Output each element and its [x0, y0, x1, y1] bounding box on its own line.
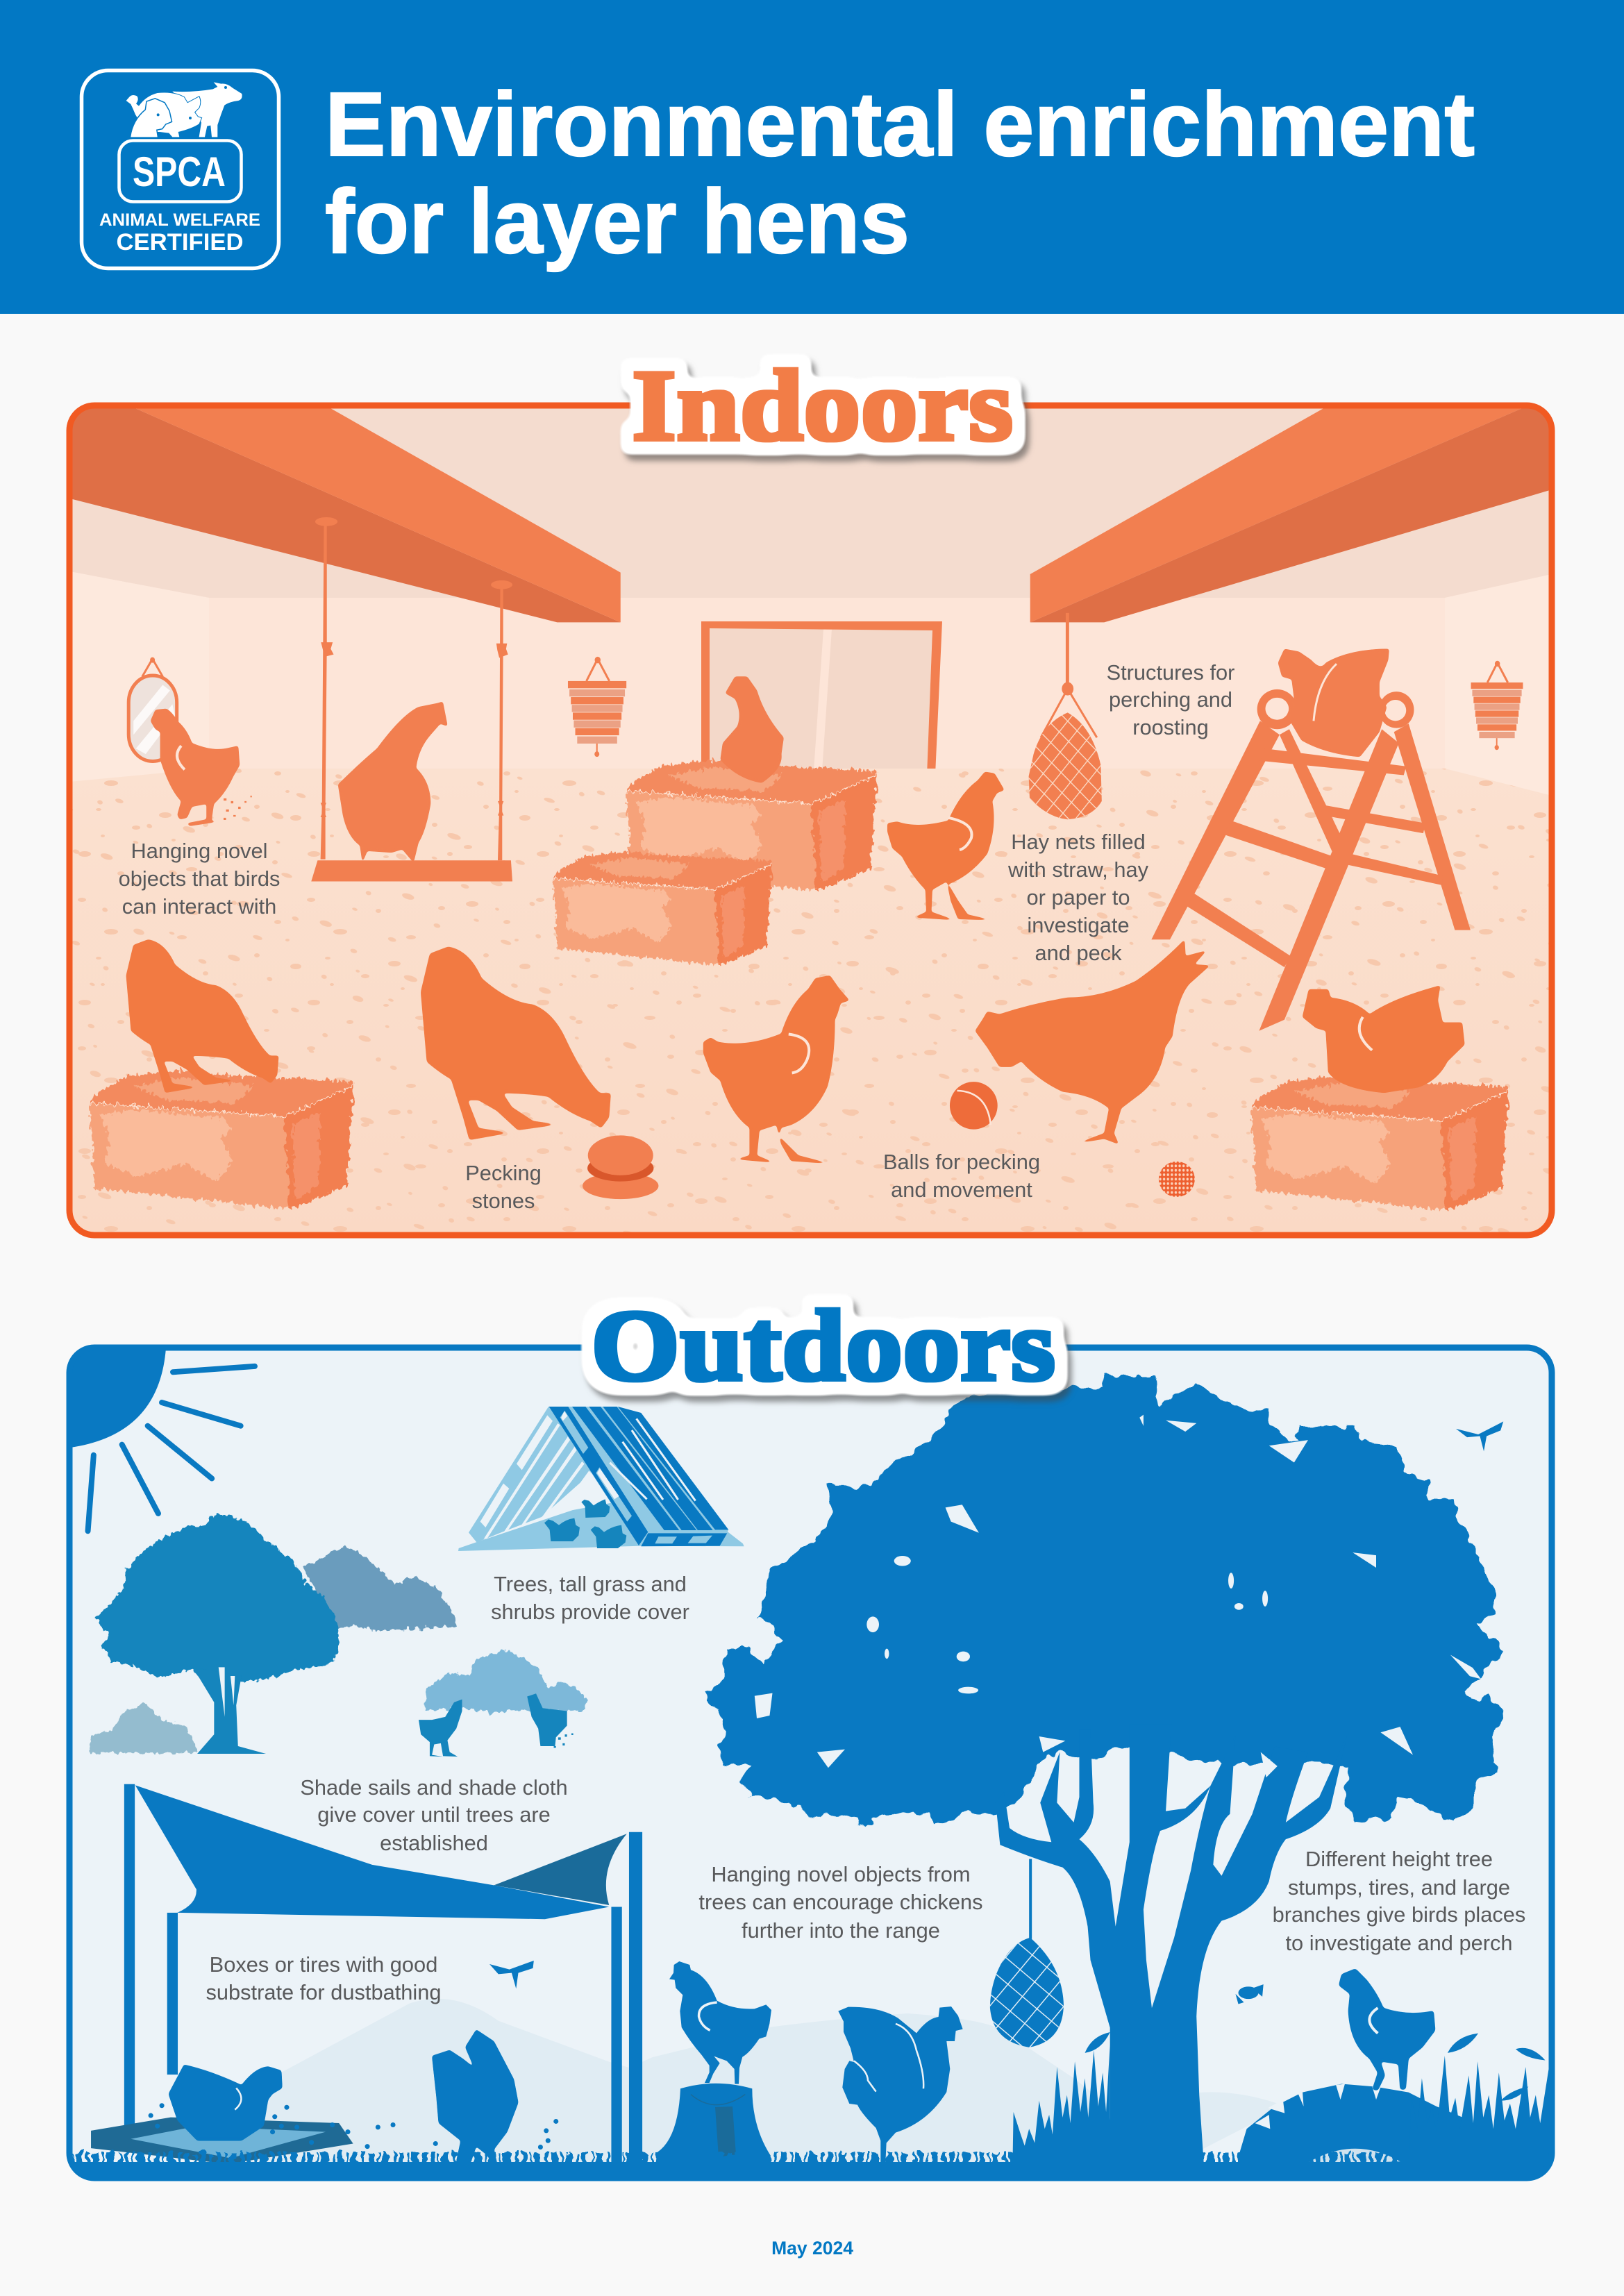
hen on tire	[1339, 1968, 1435, 2090]
hen on ladder	[1278, 649, 1389, 757]
title: Environmental enrichment	[325, 73, 1475, 175]
small hen left	[419, 1700, 462, 1757]
dragonfly	[489, 1961, 534, 1988]
bush small pale	[89, 1702, 197, 1754]
label: shade sails: Shade sails and shade cloth	[300, 1775, 568, 1800]
dragonfly top right	[1456, 1421, 1503, 1451]
label: structures: perching and	[1109, 687, 1232, 712]
ceiling	[69, 405, 1552, 598]
grass tuft right	[1409, 2034, 1551, 2179]
label: hanging novel objects from trees: further into the range	[742, 1918, 940, 1943]
label: hay nets: investigate	[1027, 913, 1130, 937]
icon: hanging bucket left	[568, 657, 626, 757]
label: balls: and movement	[891, 1178, 1032, 1202]
label: pecking stones: stones	[472, 1189, 535, 1213]
heading: Outdoors: Outdoors	[591, 1289, 1055, 1402]
swing with hen	[311, 517, 512, 882]
hay net hanging from tree	[990, 1859, 1064, 2047]
small hen right	[527, 1693, 574, 1748]
hen on back bale	[721, 677, 784, 783]
dustbath box	[91, 2118, 353, 2164]
label: hanging novel objects from trees: Hanging novel objects from	[711, 1862, 971, 1886]
SPCA logo: CERTIFIED	[117, 229, 243, 255]
hay bale back	[626, 760, 877, 891]
hen pecking near stones	[421, 947, 611, 1140]
mid bush blue	[424, 1650, 589, 1713]
hay net hanging from beam	[1029, 613, 1102, 819]
beam: right	[1030, 402, 1556, 622]
hen large with raised tail	[975, 939, 1210, 1144]
sun	[66, 1343, 255, 1531]
hill behind stump and hen	[629, 2013, 1286, 2173]
label: pecking stones: Pecking	[465, 1161, 542, 1185]
icon: golf ball	[1159, 1162, 1195, 1197]
outdoors border	[69, 1348, 1552, 2178]
indoors border	[69, 405, 1552, 1235]
SPCA logo: ANIMAL WELFARE	[99, 210, 260, 230]
hay bale front left	[89, 1070, 353, 1209]
hen standing centre	[703, 975, 849, 1164]
icon: tennis ball	[950, 1082, 998, 1130]
hen on stump	[669, 1961, 771, 2084]
label: structures: roosting	[1132, 715, 1209, 739]
icon: pecking stone	[583, 1135, 658, 1199]
hills under shade sail	[242, 1999, 629, 2167]
hen standing under sail	[432, 2029, 519, 2179]
header band	[0, 0, 1624, 314]
label: trees: Trees, tall grass and	[494, 1572, 687, 1596]
label: boxes or tires: Boxes or tires with good	[210, 1952, 437, 1977]
label: hay nets: and peck	[1035, 941, 1122, 965]
hen pecking on bale	[126, 939, 278, 1093]
icon: mirror	[128, 657, 177, 762]
shade sail and posts	[124, 1784, 642, 2179]
heading: Indoors: Indoors	[632, 349, 1013, 462]
label: shade sails: give cover until trees are	[317, 1802, 551, 1827]
A-frame pallet shelter	[458, 1407, 744, 1551]
beam: left	[67, 402, 621, 622]
tire	[1239, 2084, 1492, 2179]
label: hay nets: with straw, hay	[1007, 857, 1149, 882]
icon: hanging bucket right	[1471, 661, 1523, 750]
label: hay nets: Hay nets filled	[1011, 830, 1146, 854]
big tree	[707, 1375, 1503, 2179]
hen on right bale	[1303, 985, 1464, 1093]
barn door	[701, 621, 942, 775]
hen dustbathing	[151, 2065, 556, 2147]
label: balls: Balls for pecking	[883, 1150, 1040, 1174]
grass tuft by trunk	[1012, 2032, 1110, 2179]
label: shade sails: established	[380, 1831, 488, 1855]
floor	[69, 769, 1552, 1235]
bee	[1235, 1984, 1264, 2004]
right part of scene	[707, 1375, 1551, 2179]
tree stump	[655, 2084, 771, 2168]
hen near hay net	[887, 772, 1005, 920]
SPCA logo: SPCA	[133, 149, 226, 195]
logo animals silhouette	[126, 82, 242, 137]
side walls	[69, 571, 1552, 796]
ground: stump, two hens traced at 1:3	[655, 1961, 963, 2168]
label: different height stumps: stumps, tires, and large	[1288, 1875, 1510, 1900]
label: hanging novel objects from trees: trees can encourage chickens	[698, 1890, 983, 1914]
bush grey behind tree	[303, 1545, 455, 1631]
hay bale middle	[553, 851, 772, 965]
scene drawn in a scaled tracing space	[67, 402, 1556, 1210]
date: May 2024	[771, 2238, 853, 2259]
panel: outdoors	[62, 1343, 1562, 2180]
label: hanging novel objects: objects that birds	[119, 866, 280, 891]
label: trees: shrubs provide cover	[491, 1600, 689, 1624]
label: hay nets: or paper to	[1027, 885, 1130, 910]
title: for layer hens	[325, 170, 910, 272]
label: boxes or tires: substrate for dustbathing	[206, 1980, 441, 2004]
teal tree	[97, 1512, 339, 1754]
crown gaps	[755, 1415, 1481, 1777]
stepladder perch	[1151, 689, 1471, 1031]
grass strip along ground	[62, 2161, 1562, 2180]
label: different height stumps: to investigate and perch	[1285, 1931, 1513, 1955]
label: structures: Structures for	[1107, 660, 1234, 685]
label: different height stumps: branches give birds places	[1273, 1902, 1525, 1927]
hen at mirror	[151, 709, 252, 826]
label: hanging novel objects: Hanging novel	[131, 839, 267, 863]
SPCA logo	[82, 71, 279, 268]
hay bale front right	[1250, 1075, 1509, 1210]
title	[325, 73, 1475, 272]
panel: indoors	[67, 402, 1556, 1235]
label: hanging novel objects: can interact with	[122, 894, 276, 919]
hen large right	[838, 2006, 963, 2168]
label: different height stumps: Different height tree	[1305, 1847, 1493, 1871]
left part of scene	[66, 1343, 642, 2179]
